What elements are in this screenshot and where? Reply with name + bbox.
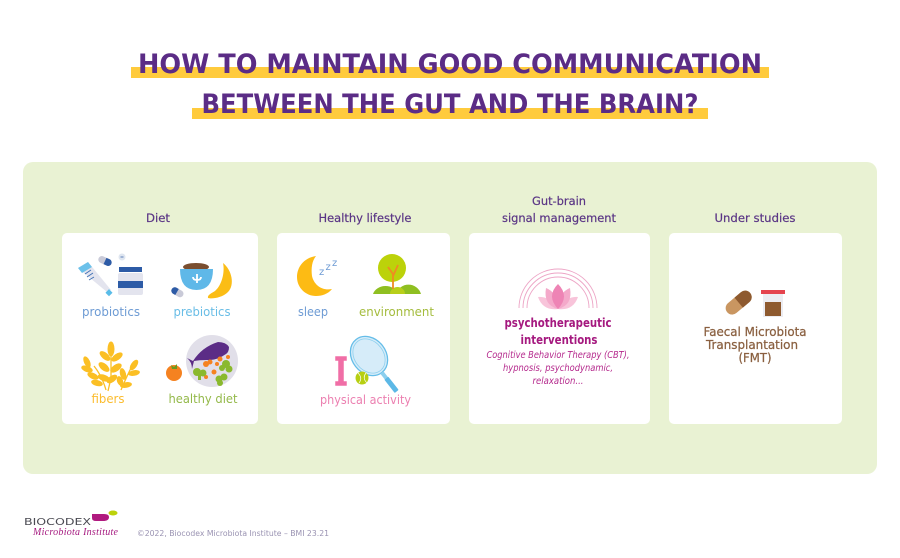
icon: moon and zzz (297, 256, 337, 296)
text: examples of interventions: hypnosis, psychodynamic, (503, 363, 613, 374)
icon: fibers (80, 342, 140, 391)
panel: gut-brain signal management (469, 233, 650, 424)
icon: lotus (519, 269, 597, 309)
label: fibers: fibers (92, 392, 124, 406)
label: probiotics: probiotics (82, 305, 140, 319)
icon: probiotics (78, 254, 143, 296)
label: faecal microbiota transplantation: Transplantation (705, 338, 798, 352)
title (131, 49, 769, 120)
icon: moon and zzz: z (319, 267, 324, 278)
icon: moon and zzz: z (332, 258, 337, 269)
title: BETWEEN THE GUT AND THE BRAIN? (202, 89, 698, 120)
label: environment: environment (359, 305, 434, 319)
panel: healthy lifestyle (277, 233, 450, 424)
footer: copyright: ©2022, Biocodex Microbiota Institute – BMI 23.21 (137, 529, 329, 538)
label: psychotherapeutic interventions: interventions (520, 333, 598, 347)
heading: Gut-brain signal management: signal management (502, 211, 616, 225)
label: psychotherapeutic interventions: psychotherapeutic (504, 316, 612, 330)
label: physical activity: physical activity (320, 393, 411, 407)
label: faecal microbiota transplantation (704, 325, 806, 365)
label: psychotherapeutic interventions (504, 316, 612, 347)
label: healthy diet: healthy diet (168, 392, 238, 406)
heading: Under studies: Under studies (714, 211, 796, 225)
icon: racket and ball (336, 329, 410, 402)
label: sleep: sleep (298, 305, 328, 319)
icon: healthy diet (166, 335, 238, 387)
text: examples of interventions (486, 350, 630, 387)
heading: Gut-brain signal management: Gut-brain (532, 194, 586, 208)
icon: moon and zzz: z (326, 262, 331, 273)
heading: Gut-brain signal management (502, 194, 616, 225)
text: examples of interventions: Cognitive Behavior Therapy (CBT), (486, 350, 630, 361)
label: prebiotics: prebiotics (174, 305, 230, 319)
heading: Diet: Diet (146, 211, 170, 225)
panel: green background (23, 162, 877, 474)
logo: Biocodex Microbiota Institute (24, 510, 119, 538)
icon: tree (373, 254, 421, 294)
title: HOW TO MAINTAIN GOOD COMMUNICATION (138, 49, 762, 80)
panel: diet (62, 233, 258, 424)
icon: prebiotics (170, 263, 232, 299)
panel: under studies (669, 233, 842, 424)
logo: Biocodex Microbiota Institute: Microbiota Institute (32, 527, 119, 538)
logo: Biocodex Microbiota Institute: BIOCODEX (24, 517, 91, 528)
label: faecal microbiota transplantation: (FMT) (738, 351, 772, 365)
icon: capsule and stool sample pot (723, 288, 785, 317)
text: examples of interventions: relaxation... (532, 376, 584, 387)
heading: Healthy lifestyle: Healthy lifestyle (318, 211, 412, 225)
label: faecal microbiota transplantation: Faecal Microbiota (704, 325, 806, 339)
